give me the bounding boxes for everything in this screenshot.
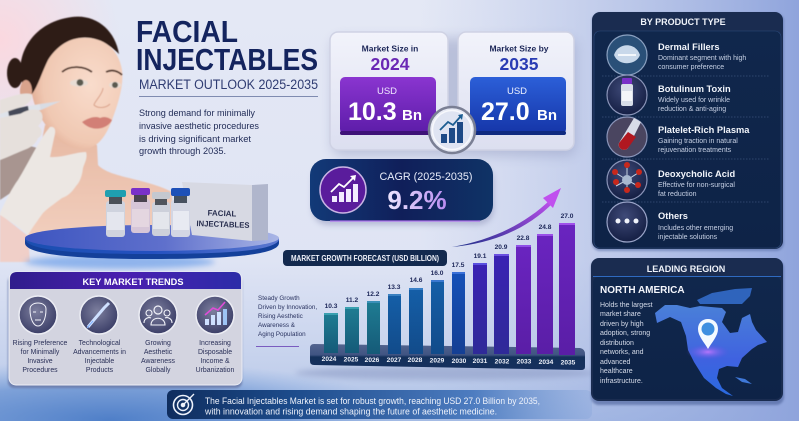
year labels: 2025 — [344, 356, 359, 364]
intro text: is driving significant market — [139, 134, 252, 144]
CAGR pill — [310, 159, 494, 225]
panel: leading region: driven by high — [600, 321, 644, 328]
year labels — [322, 356, 576, 366]
map pin — [698, 319, 718, 349]
trend: minimally invasive: Rising Preference — [13, 340, 68, 347]
value labels: 16.0 — [431, 270, 444, 277]
nose — [94, 88, 110, 108]
product box — [182, 182, 268, 241]
icon: target — [174, 394, 194, 414]
chart note: Steady Growth — [258, 295, 300, 302]
card: market size 2035: 27.0 — [481, 98, 530, 126]
panel: leading region: advanced — [600, 359, 630, 366]
eye left — [62, 67, 92, 87]
icon: growth chart badge — [429, 107, 475, 153]
panel: by product type: BY PRODUCT TYPE — [640, 17, 726, 27]
trend: aesthetic awareness: Globally — [146, 367, 171, 374]
product: dermal fillers: consumer preference — [658, 64, 724, 71]
card: market size 2024: USD — [377, 86, 397, 97]
arrow: growth trend — [452, 188, 561, 247]
product box: FACIAL — [207, 208, 237, 219]
trend: disposable income: Income & — [200, 358, 230, 365]
chart heading: MARKET GROWTH FORECAST (USD BILLION) — [291, 254, 439, 263]
bottom banner: with innovation and rising demand shaping the future of aesthetic medicine. — [204, 406, 497, 416]
card: market size 2024: 10.3 — [348, 98, 397, 126]
value labels: 19.1 — [474, 253, 487, 260]
trend: minimally invasive: Procedures — [22, 367, 58, 374]
panel: leading region: healthcare — [600, 368, 633, 375]
product: botulinum toxin: Botulinum Toxin — [658, 84, 731, 94]
product: others: injectable solutions — [658, 234, 718, 241]
product: dermal fillers: Dermal Fillers — [658, 42, 720, 52]
product: deoxycholic acid: Deoxycholic Acid — [658, 169, 735, 179]
product: botulinum toxin: reduction & anti-aging — [658, 106, 726, 113]
year labels: 2034 — [539, 359, 554, 366]
panel: key market trends: KEY MARKET TRENDS — [83, 277, 183, 287]
trend: minimally invasive — [13, 296, 68, 374]
card: market size 2024: Market Size in — [362, 44, 418, 54]
bottom banner: The Facial Injectables Market is set for robust growth, reaching USD 27.0 Billion by 2035, — [205, 396, 540, 406]
face — [32, 38, 122, 149]
panel: leading region: market share — [600, 311, 641, 318]
trend: technological advancements: Technological — [79, 340, 121, 347]
value labels: 22.8 — [517, 235, 530, 242]
title: INJECTABLES — [136, 42, 318, 77]
trend: disposable income: Disposable — [198, 349, 232, 356]
year labels: 2028 — [408, 357, 423, 364]
subtitle: MARKET OUTLOOK 2025-2035 — [139, 77, 318, 92]
product: platelet-rich plasma — [607, 117, 750, 157]
vial teal — [105, 190, 126, 237]
chart note: Awareness & — [258, 322, 296, 329]
lower gloved hand — [0, 127, 87, 235]
wrist shadow — [0, 146, 45, 200]
value labels: 17.5 — [452, 262, 465, 269]
vial purple — [131, 188, 150, 233]
product: platelet-rich plasma: Gaining traction in natural — [658, 138, 738, 145]
chart note — [256, 295, 317, 347]
trend: aesthetic awareness: Growing — [145, 340, 171, 347]
eye right — [106, 71, 122, 88]
product: others: Others — [658, 211, 688, 221]
hair — [20, 17, 119, 94]
trend: minimally invasive: for Minimally — [21, 349, 60, 356]
trend: technological advancements: Products — [86, 367, 114, 374]
year labels: 2035 — [561, 360, 576, 366]
product: dermal fillers: Dominant segment with high — [658, 55, 746, 62]
arm below glove — [0, 214, 30, 262]
product: others: Includes other emerging — [658, 225, 733, 232]
year labels: 2032 — [495, 358, 510, 366]
value labels: 27.0 — [561, 213, 574, 220]
vials — [105, 188, 190, 237]
syringe — [0, 101, 61, 118]
card: market size 2024 — [330, 32, 448, 150]
chart note: Rising Aesthetic — [258, 313, 303, 320]
upper gloved hand — [0, 93, 43, 160]
value labels: 10.3 — [325, 303, 338, 310]
CAGR pill: 9.2% — [387, 185, 447, 215]
title: FACIAL — [136, 14, 238, 49]
trend: aesthetic awareness — [139, 296, 177, 374]
bar chart — [295, 213, 595, 380]
card: market size 2035: Market Size by — [489, 44, 549, 54]
intro text — [139, 108, 259, 156]
title — [136, 14, 318, 77]
trend: technological advancements: Injectable — [85, 358, 114, 365]
chart heading — [283, 250, 447, 266]
intro text: invasive aesthetic procedures — [139, 121, 259, 131]
panel: leading region — [591, 258, 784, 405]
CAGR pill: CAGR (2025-2035) — [379, 171, 473, 183]
chart note: Driven by Innovation, — [258, 304, 317, 311]
chart platform — [310, 344, 585, 370]
product: platelet-rich plasma: Platelet-Rich Plasma — [658, 125, 750, 135]
vial blue — [171, 188, 190, 237]
year labels: 2030 — [452, 358, 467, 365]
product: deoxycholic acid — [607, 160, 735, 200]
panel: leading region: NORTH AMERICA — [600, 285, 685, 296]
value labels: 13.3 — [388, 284, 401, 291]
panel: by product type — [592, 12, 784, 251]
value labels: 20.9 — [495, 244, 508, 251]
value labels: 14.6 — [410, 277, 423, 284]
panel: leading region: adoption, strong — [600, 330, 650, 337]
card: market size 2035: USD — [507, 86, 527, 97]
vial silver — [152, 192, 170, 236]
bars — [324, 223, 575, 355]
trend: disposable income — [196, 296, 235, 374]
panel: leading region: infrastructure. — [600, 378, 643, 385]
product: others — [607, 202, 733, 242]
panel: leading region: networks, and — [600, 349, 644, 356]
trend: disposable income: Urbanization — [196, 367, 235, 374]
bottom banner — [167, 390, 592, 419]
lips — [82, 117, 112, 129]
year labels: 2029 — [430, 358, 445, 364]
illustration: woman receiving injection — [0, 17, 172, 262]
product: deoxycholic acid: fat reduction — [658, 191, 697, 198]
map: north america — [655, 288, 767, 396]
shoulder and neck — [28, 125, 172, 240]
pedestal — [25, 225, 279, 269]
icon: CAGR chart — [320, 167, 366, 213]
card: market size 2024: Bn — [402, 107, 422, 124]
stat cards shadow — [332, 38, 576, 156]
panel: leading region: LEADING REGION — [647, 264, 725, 274]
intro text: growth through 2035. — [139, 146, 226, 156]
chart note: Aging Population — [258, 331, 306, 338]
card: market size 2035: 2035 — [500, 54, 539, 74]
year labels: 2033 — [517, 358, 532, 366]
value labels: 11.2 — [346, 297, 359, 304]
trend: disposable income: Increasing — [199, 340, 231, 347]
product: dermal fillers — [607, 35, 746, 75]
card: market size 2035 — [458, 32, 574, 150]
trend: technological advancements — [73, 296, 126, 374]
product: deoxycholic acid: Effective for non-surgical — [658, 182, 735, 189]
ear — [20, 80, 32, 102]
trend: aesthetic awareness: Aesthetic — [144, 349, 173, 356]
panel: leading region: Holds the largest — [600, 302, 653, 309]
year labels: 2031 — [473, 358, 488, 365]
year labels: 2026 — [365, 357, 380, 364]
value labels: 12.2 — [367, 291, 380, 298]
bun — [7, 58, 23, 88]
intro text: Strong demand for minimally — [139, 108, 255, 118]
value labels — [325, 213, 574, 310]
panel: key market trends — [8, 272, 242, 388]
product: botulinum toxin: Widely used for wrinkle — [658, 97, 730, 104]
panel: leading region: distribution — [600, 340, 634, 347]
card: market size 2024: 2024 — [371, 54, 410, 74]
product: platelet-rich plasma: rejuvenation treatments — [658, 147, 732, 154]
year labels: 2024 — [322, 356, 337, 363]
year labels: 2027 — [387, 357, 402, 364]
trend: minimally invasive: Invasive — [27, 358, 53, 365]
trend: aesthetic awareness: Awareness — [141, 358, 176, 365]
card: market size 2035: Bn — [537, 107, 557, 124]
product: botulinum toxin — [607, 75, 731, 115]
product box: INJECTABLES — [196, 219, 250, 230]
value labels: 24.8 — [539, 224, 552, 231]
trend: technological advancements: Advancements in — [73, 349, 126, 356]
